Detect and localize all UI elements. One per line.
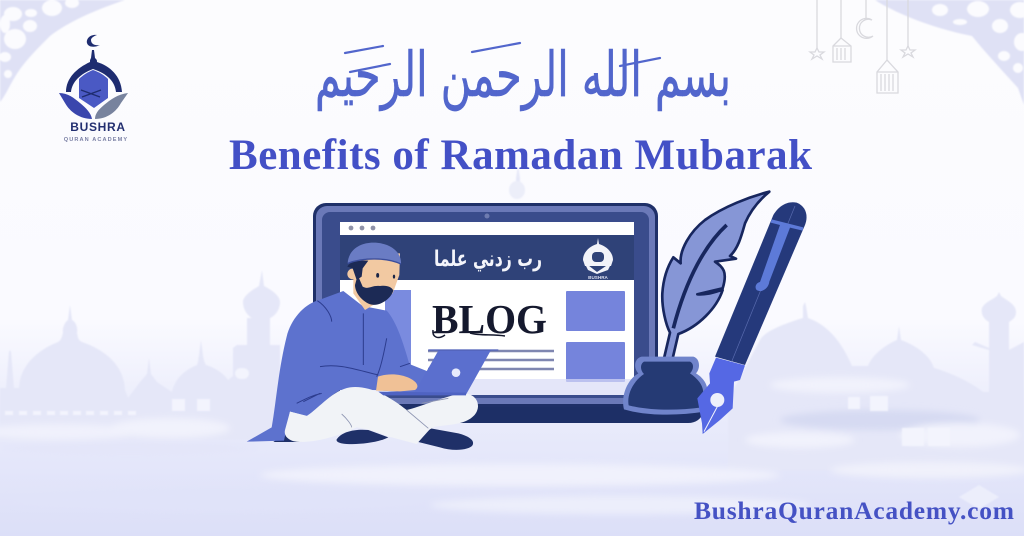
neck and face bbox=[347, 243, 401, 310]
eye bbox=[376, 273, 379, 278]
decoration: top-left lattice corner bbox=[0, 0, 125, 102]
laptop outer frame bbox=[313, 203, 658, 407]
bismillah calligraphy bbox=[315, 38, 731, 111]
laptop monitor bbox=[313, 203, 705, 423]
header arabic calligraphy: رب زدني علما bbox=[434, 247, 542, 272]
logo: Bushra Quran Academy bbox=[59, 35, 128, 143]
small logo on header bbox=[583, 238, 613, 280]
ink bottle and quill bbox=[623, 192, 807, 434]
trouser fold lines bbox=[342, 398, 448, 428]
man with laptop bbox=[247, 243, 498, 450]
white trousers bbox=[285, 387, 478, 444]
logo icon: left hand bbox=[59, 93, 92, 119]
logo wordmark: BUSHRA bbox=[70, 120, 126, 134]
fountain pen bbox=[697, 202, 807, 434]
shoes bbox=[273, 428, 473, 450]
ink bottle bbox=[623, 357, 707, 415]
kurta shirt bbox=[247, 291, 428, 442]
title: Benefits of Ramadan Mubarak bbox=[229, 132, 812, 179]
website footer text: BushraQuranAcademy.com bbox=[694, 496, 1014, 525]
small logo on header: BUSHRA bbox=[588, 275, 609, 280]
background: mosque skyline bbox=[0, 166, 1024, 470]
text lines bbox=[428, 351, 554, 369]
logo icon: arch with book bbox=[79, 70, 108, 108]
logo icon: right hand bbox=[95, 93, 128, 119]
decoration: hanging lanterns, moon and stars bbox=[810, 0, 915, 93]
browser window bbox=[340, 222, 634, 395]
logo icon: crescent bbox=[87, 35, 100, 47]
left content block bbox=[385, 290, 411, 380]
logo tagline: QURAN ACADEMY bbox=[64, 137, 128, 143]
small laptop bbox=[378, 350, 498, 395]
cap bbox=[348, 243, 401, 264]
right content blocks bbox=[566, 291, 625, 331]
pen barrel bbox=[715, 202, 807, 365]
decoration: top-right lattice corner bbox=[875, 0, 1024, 105]
logo icon: mosque dome bbox=[66, 50, 122, 92]
pen nib bbox=[697, 358, 745, 434]
hand bbox=[376, 374, 417, 391]
beard bbox=[355, 275, 393, 305]
BLOG heading: BLOG bbox=[432, 296, 547, 342]
background: small diamond ornament bbox=[959, 485, 999, 509]
browser header bar bbox=[340, 235, 634, 280]
pen clip bbox=[756, 219, 803, 291]
laptop base bbox=[365, 403, 705, 423]
quill feather bbox=[662, 192, 769, 358]
background: cloud bank bbox=[0, 377, 1024, 514]
shirt fold lines bbox=[297, 301, 410, 403]
bismillah calligraphy: بسم الله الرحمن الرحيم bbox=[315, 38, 731, 111]
